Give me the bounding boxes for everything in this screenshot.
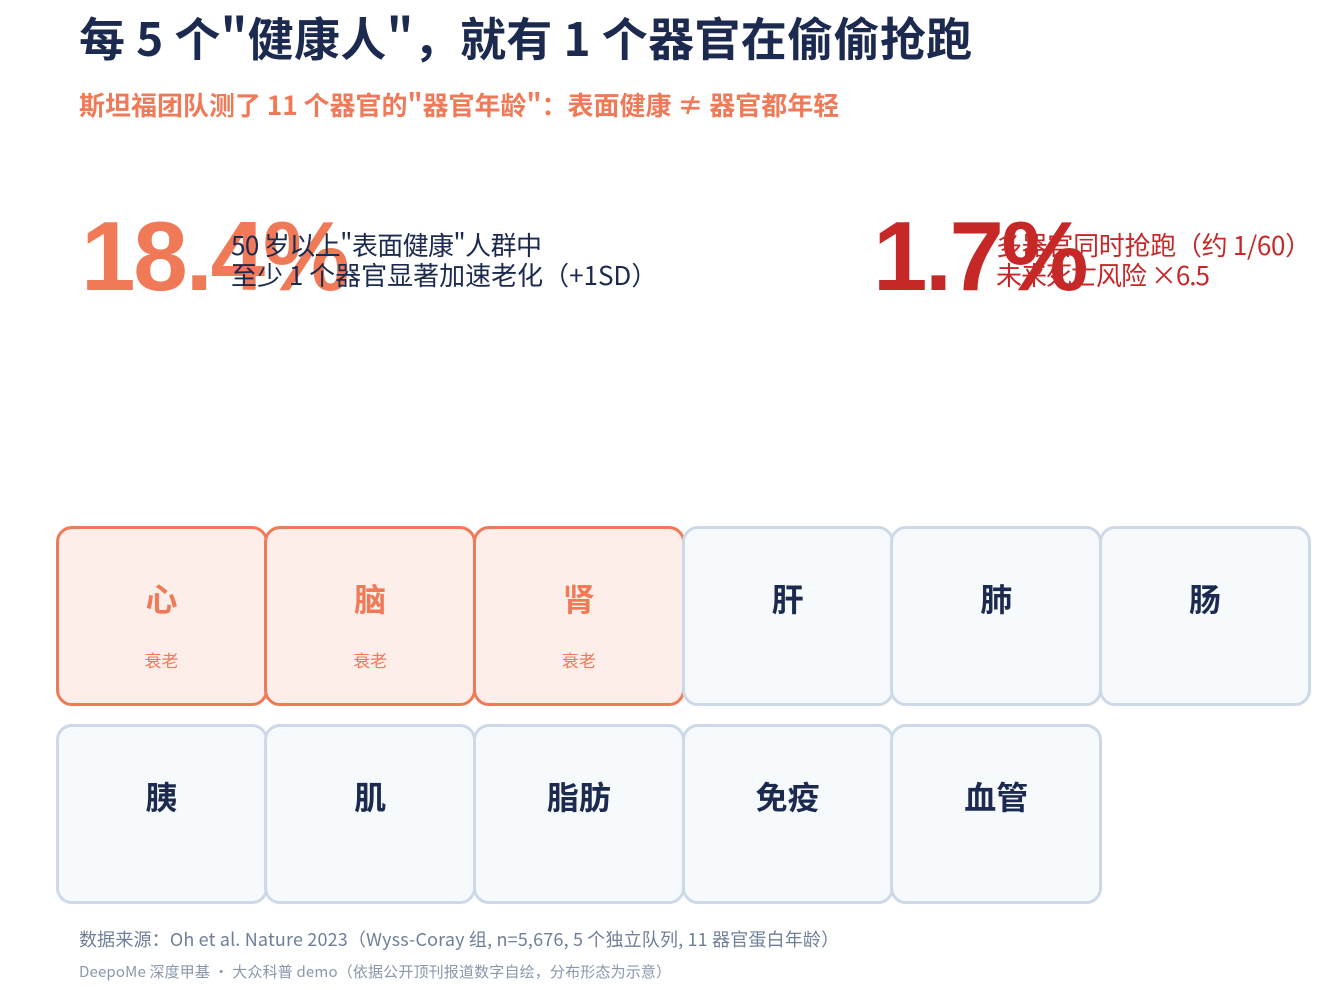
organ card: 脑: 脑 bbox=[354, 575, 386, 621]
organ card: 肝: 肝 bbox=[772, 575, 804, 621]
stat description: 至少 1 个器官显著加速老化（+1SD） bbox=[231, 256, 657, 293]
organ card: 心: 衰老 bbox=[144, 647, 178, 672]
organ card: 肌: 肌 bbox=[354, 773, 386, 819]
stat number 18.4%: 18.4% bbox=[81, 200, 348, 310]
organ card: 免疫: 免疫 bbox=[756, 773, 820, 819]
organ grid bbox=[56, 526, 1311, 904]
stat description bbox=[996, 226, 1311, 293]
organ card: 肠 bbox=[1099, 526, 1311, 706]
organ card: 肝 bbox=[682, 526, 894, 706]
stat number 1.7%: 1.7% bbox=[873, 200, 1086, 310]
organ card: 脂肪: 脂肪 bbox=[547, 773, 611, 819]
organ card: 肾 bbox=[473, 526, 685, 706]
organ card: 心: 心 bbox=[145, 575, 178, 621]
source note: 数据来源：Oh et al. Nature 2023（Wyss-Coray 组, n=5,676, 5 个独立队列, 11 器官蛋白年龄） bbox=[79, 926, 839, 952]
stat description: 多器官同时抢跑（约 1/60） bbox=[996, 226, 1311, 263]
stat description bbox=[231, 226, 657, 293]
organ card: 肌 bbox=[264, 724, 476, 904]
organ card: 肺: 肺 bbox=[980, 575, 1012, 621]
subtitle: 斯坦福团队测了 11 个器官的"器官年龄"：表面健康 ≠ 器官都年轻 bbox=[79, 86, 839, 123]
stat: 18.4% bbox=[81, 200, 657, 310]
credit note: DeepoMe 深度甲基 · 大众科普 demo（依据公开顶刊报道数字自绘，分布形态为示意） bbox=[79, 961, 671, 982]
organ card: 血管: 血管 bbox=[964, 773, 1028, 819]
organ card: 肺 bbox=[890, 526, 1102, 706]
organ card: 肾: 衰老 bbox=[562, 647, 596, 672]
organ card: 胰: 胰 bbox=[145, 773, 178, 819]
organ card: 脑 bbox=[264, 526, 476, 706]
organ card: 心 bbox=[56, 526, 268, 706]
organ card: 血管 bbox=[890, 724, 1102, 904]
organ card: 脑: 衰老 bbox=[353, 647, 387, 672]
stat description: 50 岁以上"表面健康"人群中 bbox=[231, 226, 541, 263]
stat description: 未来死亡风险 ×6.5 bbox=[996, 256, 1209, 293]
organ card: 肠: 肠 bbox=[1189, 575, 1221, 621]
title: 每 5 个"健康人"，就有 1 个器官在偷偷抢跑 bbox=[79, 4, 973, 70]
organ card: 肾: 肾 bbox=[563, 575, 595, 621]
stat: 1.7% bbox=[873, 200, 1311, 310]
organ card: 免疫 bbox=[682, 724, 894, 904]
organ card: 脂肪 bbox=[473, 724, 685, 904]
organ card: 胰 bbox=[56, 724, 268, 904]
